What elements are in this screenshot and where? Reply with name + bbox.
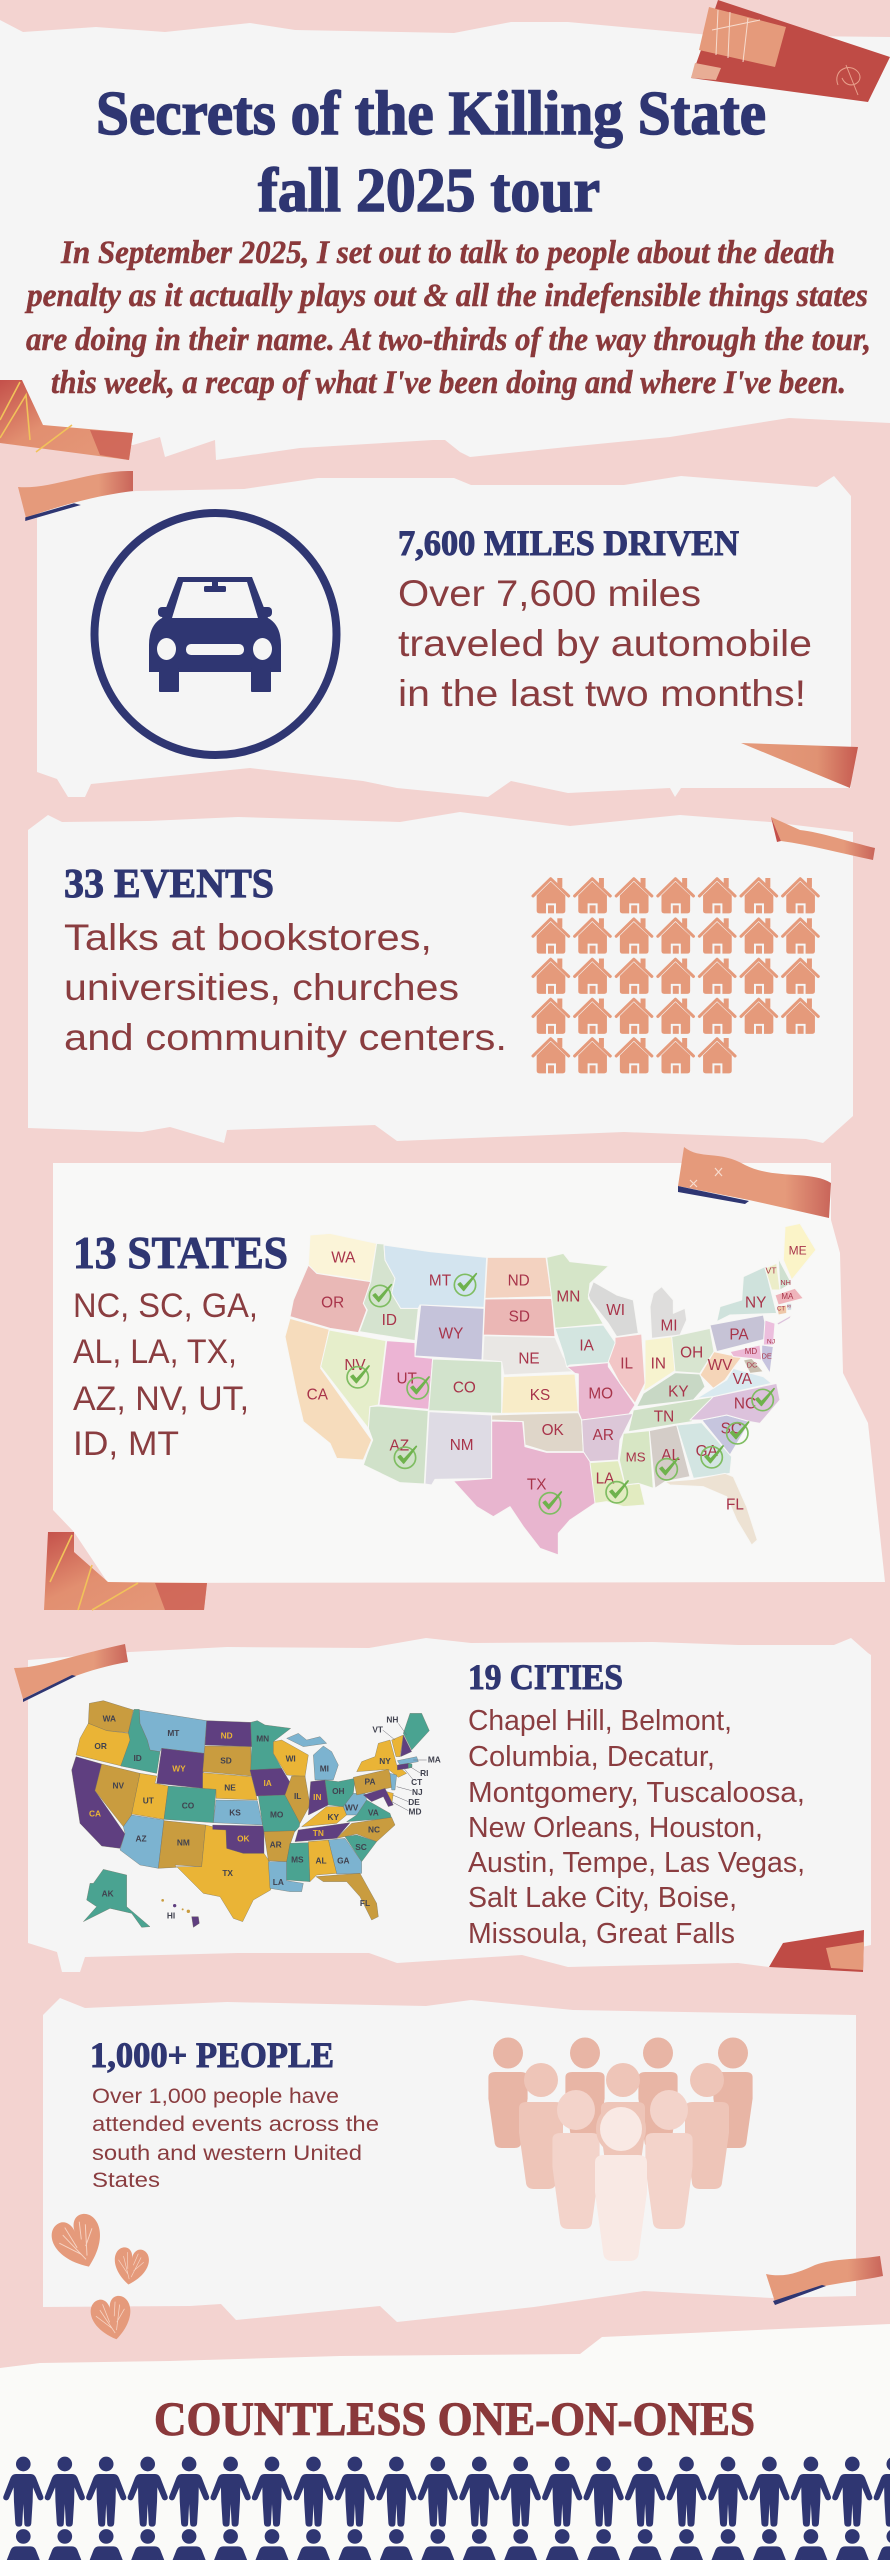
state labels: east: CT: [777, 1307, 785, 1313]
state labels: west: [307, 1250, 565, 1493]
state labels: colored map: VT: [372, 1724, 383, 1734]
state labels: colored map: KS: [229, 1807, 241, 1817]
state labels: colored map: TN: [313, 1828, 324, 1838]
state labels: east: NY: [745, 1294, 766, 1311]
state labels: colored map: MD: [409, 1806, 421, 1816]
state labels: colored map: AZ: [135, 1834, 147, 1844]
state labels: west: WY: [439, 1325, 463, 1342]
body: states list: AL, LA, TX,: [73, 1333, 237, 1371]
state labels: colored map: VA: [368, 1808, 379, 1818]
state labels: colored map: WV: [345, 1803, 359, 1813]
state labels: colored map: MI: [320, 1764, 329, 1774]
state labels: east: MS: [626, 1450, 646, 1465]
title: fall 2025 tour: [258, 157, 600, 225]
decoration: events top right tape: [771, 817, 875, 860]
body: city list: Missoula, Great Falls: [468, 1918, 735, 1950]
state labels: colored map: NH: [386, 1715, 398, 1725]
icon: crowd of people: [488, 2038, 753, 2261]
state labels: colored map: GA: [337, 1855, 350, 1865]
panel: miles driven: [37, 476, 851, 797]
icon row: people first row: [3, 2457, 890, 2527]
body: states list: [73, 1287, 258, 1463]
decoration: cities bottom right scrap: [769, 1930, 864, 1972]
state labels: colored map: ID: [133, 1753, 142, 1763]
state labels: east: RI: [787, 1303, 791, 1308]
state labels: colored map: LA: [273, 1877, 284, 1887]
state labels: colored map: FL: [360, 1898, 370, 1908]
state labels: east: IA: [579, 1338, 595, 1355]
state labels: colored map: IL: [294, 1791, 301, 1801]
state labels: east: MN: [556, 1289, 580, 1306]
body: city list: Austin, Tempe, Las Vegas,: [468, 1847, 805, 1879]
state labels: east: IN: [651, 1355, 666, 1372]
state labels: colored map: OK: [237, 1834, 250, 1844]
heading: countless one-on-ones: COUNTLESS ONE-ON-ONES: [154, 2393, 755, 2446]
panel: one-on-ones: [0, 2324, 890, 2560]
body: events: [64, 917, 507, 1058]
state labels: east: WI: [606, 1302, 625, 1319]
body: events: and community centers.: [64, 1017, 507, 1058]
state labels: west: OR: [321, 1294, 344, 1311]
leader lines: [383, 1723, 427, 1811]
intro paragraph: penalty as it actually plays out & all the indefensible things states: [24, 278, 868, 314]
state labels: east: NJ: [767, 1338, 775, 1345]
panel: states: [53, 1163, 885, 1583]
state labels: east: NH: [780, 1278, 791, 1287]
state labels: colored map: SC: [355, 1842, 367, 1852]
decoration: states top right tape: [678, 1147, 831, 1218]
state labels: west: KS: [530, 1387, 550, 1404]
state labels: east: DC: [747, 1360, 758, 1369]
state labels: colored map: NC: [368, 1824, 380, 1834]
state labels: west: MT: [429, 1273, 452, 1290]
panel: events: [28, 812, 853, 1143]
state labels: east: SC: [721, 1420, 742, 1437]
decoration: states bottom left scrap: [44, 1532, 207, 1610]
panel: cities: [28, 1638, 871, 1972]
state labels: east: VT: [765, 1265, 777, 1275]
state labels: east: OH: [680, 1344, 703, 1361]
icon: hearts: [47, 2210, 150, 2343]
state labels: west: CA: [307, 1386, 329, 1403]
decoration: miles bottom right scrap: [741, 743, 858, 788]
state labels: east: IL: [620, 1355, 634, 1372]
state labels: colored map: [89, 1714, 441, 1921]
state labels: east: MA: [781, 1292, 794, 1301]
map: colored US: [72, 1701, 441, 1927]
state labels: east: KY: [668, 1384, 689, 1401]
state labels: colored map: MN: [256, 1734, 269, 1744]
state labels: west: NE: [518, 1350, 540, 1367]
state labels: colored map: NY: [379, 1756, 391, 1766]
body: states list: ID, MT: [73, 1425, 179, 1463]
body: city list: Montgomery, Tuscaloosa,: [468, 1777, 805, 1809]
state labels: colored map: RI: [420, 1768, 429, 1778]
state labels: colored map: CO: [182, 1800, 195, 1810]
state labels: colored map: AK: [102, 1889, 114, 1899]
state labels: colored map: TX: [222, 1868, 233, 1878]
state labels: east: NC: [734, 1395, 756, 1412]
decoration: miles top left tape: [18, 471, 133, 520]
state labels: colored map: IA: [263, 1778, 272, 1788]
body: miles: [398, 573, 812, 714]
state labels: east: AR: [593, 1427, 614, 1444]
state labels: colored map: NE: [224, 1783, 236, 1793]
state labels: colored map: AL: [315, 1855, 327, 1865]
body: events: universities, churches: [64, 967, 459, 1008]
heading: events: 33 EVENTS: [64, 860, 274, 906]
state labels: colored map: PA: [365, 1776, 375, 1786]
state labels: east: ME: [789, 1243, 807, 1257]
state labels: colored map: UT: [143, 1795, 154, 1805]
icon grid: 33 houses: [533, 878, 818, 1073]
heading: cities: 19 CITIES: [468, 1657, 623, 1697]
state labels: colored map: NJ: [412, 1787, 423, 1797]
state labels: colored map: WA: [103, 1714, 116, 1724]
state labels: colored map: OR: [94, 1741, 107, 1751]
panel: people: [43, 1998, 856, 2322]
body: people: States: [92, 2169, 160, 2192]
state labels: colored map: DE: [408, 1797, 420, 1807]
state labels: colored map: IN: [313, 1792, 322, 1802]
intro paragraph: [24, 235, 871, 401]
body: city list: Salt Lake City, Boise,: [468, 1882, 737, 1914]
decoration: people bottom right tape: [766, 2256, 883, 2305]
state labels: west: CO: [453, 1380, 476, 1397]
body: city list: Chapel Hill, Belmont,: [468, 1705, 732, 1737]
state labels: east: MI: [660, 1318, 678, 1335]
body: states list: AZ, NV, UT,: [73, 1380, 249, 1418]
state labels: east: VA: [733, 1371, 753, 1388]
body: states list: NC, SC, GA,: [73, 1287, 258, 1325]
state labels: west: SD: [509, 1309, 530, 1326]
state labels: west: NV: [344, 1357, 366, 1374]
state labels: colored map: AR: [270, 1839, 282, 1849]
state labels: colored map: WI: [286, 1754, 296, 1764]
state labels: colored map: WY: [172, 1764, 186, 1774]
state labels: west: NM: [450, 1437, 474, 1454]
state labels: west: ND: [508, 1273, 530, 1290]
state labels: colored map: KY: [328, 1812, 340, 1822]
state labels: colored map: MO: [270, 1809, 284, 1819]
state labels: east: WV: [708, 1357, 733, 1374]
map: pastel US with check marks: [285, 1223, 816, 1555]
state labels: west: UT: [396, 1370, 418, 1387]
state labels: colored map: MS: [291, 1854, 304, 1864]
decoration: top right paper scrap: [691, 0, 890, 102]
state labels: west: OK: [542, 1422, 565, 1439]
title: [96, 80, 766, 225]
body: city list: Columbia, Decatur,: [468, 1741, 715, 1773]
state labels: colored map: CT: [411, 1777, 422, 1787]
state labels: colored map: NV: [113, 1780, 125, 1790]
intro paragraph: this week, a recap of what I've been doing and where I've been.: [51, 365, 846, 401]
body: miles: Over 7,600 miles: [398, 573, 701, 614]
state labels: east: AL: [661, 1447, 681, 1464]
heading: people: 1,000+ PEOPLE: [90, 2035, 334, 2075]
title: Secrets of the Killing State: [96, 80, 766, 148]
state labels: colored map: CA: [89, 1809, 101, 1819]
state labels: east: DE: [762, 1351, 772, 1360]
state labels: colored map: ND: [221, 1730, 233, 1740]
state labels: colored map: SD: [220, 1755, 232, 1765]
state labels: colored map: HI: [167, 1911, 175, 1921]
body: miles: traveled by automobile: [398, 623, 812, 664]
check marks: [347, 1274, 774, 1514]
heading: states: 13 STATES: [73, 1228, 288, 1278]
state labels: west: WA: [331, 1250, 356, 1267]
body: people: attended events across the: [92, 2113, 379, 2136]
body: city list: [468, 1705, 805, 1950]
state labels: colored map: NM: [177, 1838, 190, 1848]
state labels: east: [556, 1243, 807, 1513]
state labels: colored map: MA: [428, 1755, 441, 1765]
body: people: Over 1,000 people have: [92, 2085, 339, 2108]
body: events: Talks at bookstores,: [64, 917, 432, 958]
state labels: east: MO: [588, 1385, 613, 1402]
decoration: cities top left tape: [14, 1644, 128, 1702]
state labels: east: FL: [726, 1496, 744, 1513]
state labels: east: MD: [745, 1347, 757, 1356]
state labels: east: GA: [696, 1443, 719, 1460]
state labels: west: TX: [527, 1476, 546, 1493]
body: people: south and western United: [92, 2142, 362, 2165]
state labels: east: PA: [729, 1326, 749, 1343]
state labels: colored map: OH: [332, 1786, 345, 1796]
heading: miles: 7,600 MILES DRIVEN: [398, 523, 739, 563]
decoration: header bottom left scrap: [0, 380, 133, 460]
icon: car in circle: [94, 513, 336, 755]
state labels: west: ID: [382, 1312, 397, 1329]
panel: header: [0, 20, 890, 460]
icon row: people second row: [3, 2529, 890, 2560]
body: people: [92, 2085, 379, 2192]
body: city list: New Orleans, Houston,: [468, 1812, 763, 1844]
state labels: east: LA: [596, 1470, 615, 1487]
state labels: east: TN: [654, 1409, 674, 1426]
intro paragraph: In September 2025, I set out to talk to people about the death: [60, 235, 835, 271]
state labels: west: AZ: [390, 1438, 409, 1455]
state labels: colored map: MT: [167, 1728, 179, 1738]
body: miles: in the last two months!: [398, 673, 806, 714]
